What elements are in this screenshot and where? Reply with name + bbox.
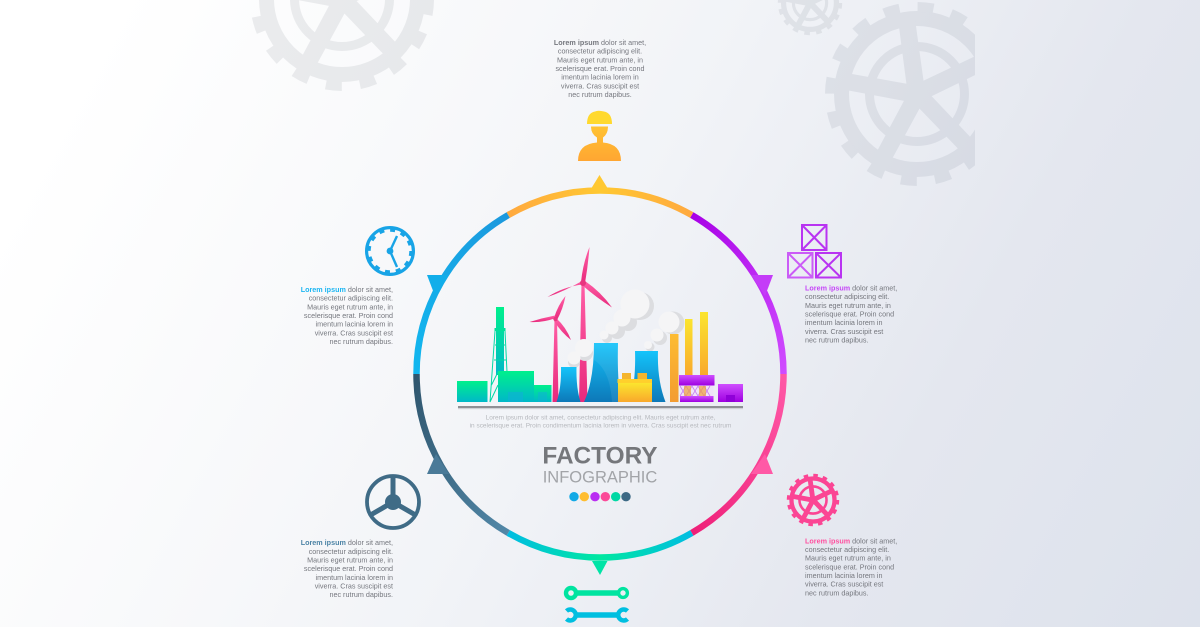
segment: slate	[416, 374, 508, 533]
purple box	[718, 384, 743, 402]
text block: right bottom: Lorem ipsum dolor sit amet,	[805, 536, 897, 545]
text block: left bottom: consectetur adipiscing elit.	[309, 547, 393, 556]
yellow building	[618, 373, 652, 402]
text block: left top: nec rutrum dapibus.	[329, 337, 393, 346]
purple plant	[679, 375, 714, 402]
segment: yellow	[508, 175, 692, 215]
text block: left bottom: imentum lacinia lorem in	[316, 573, 393, 582]
text block: left top: scelerisque erat. Proin cond	[304, 311, 393, 320]
text block: right top: nec rutrum dapibus.	[805, 336, 869, 344]
text block: top: viverra. Cras suscipit est	[561, 81, 639, 90]
background gear: small top right	[780, 0, 840, 33]
text block: left top: Mauris eget rutrum ante, in	[307, 302, 393, 311]
text block: right top	[805, 284, 897, 344]
text block: top: imentum lacinia lorem in	[561, 73, 639, 82]
background gear: top left	[255, 0, 429, 86]
smoke clouds	[568, 290, 684, 368]
text block: right top: Mauris eget rutrum ante, in	[805, 301, 891, 310]
centre caption: Lorem ipsum dolor sit amet, consectetur adipiscing elit. Mauris eget rutrum ante,	[486, 414, 716, 422]
text block: left top: viverra. Cras suscipit est	[315, 328, 393, 337]
icon: stacked crates	[788, 225, 841, 278]
subtitle: infographic: INFOGRAPHIC	[543, 469, 657, 487]
background gear: large right	[830, 7, 1004, 181]
text block: right bottom	[805, 536, 897, 597]
icon: pink gear	[788, 475, 838, 525]
text block: right top: scelerisque erat. Proin cond	[805, 310, 894, 318]
text block: left bottom: scelerisque erat. Proin cond	[304, 564, 393, 573]
title: factory: FACTORY	[542, 442, 658, 469]
text block: left top: Lorem ipsum dolor sit amet,	[301, 285, 393, 294]
icon: steering wheel	[367, 476, 419, 528]
text block: top: Lorem ipsum dolor sit amet,	[554, 38, 646, 47]
text block: top: nec rutrum dapibus.	[568, 90, 632, 99]
segment: teal	[508, 533, 692, 575]
text block: left top	[301, 285, 393, 346]
text block: right top: viverra. Cras suscipit est	[805, 327, 883, 336]
green tank	[457, 381, 488, 402]
centre caption	[470, 414, 731, 430]
text block: top: consectetur adipiscing elit.	[558, 47, 642, 56]
text block: right bottom: Mauris eget rutrum ante, in	[805, 554, 891, 563]
large cooling tower	[584, 343, 621, 402]
colour dots	[569, 492, 631, 501]
icon: ring spanner	[566, 588, 627, 598]
text block: left bottom: viverra. Cras suscipit est	[315, 582, 393, 590]
centre caption: in scelerisque erat. Proin condimentum lacinia lorem in viverra. Cras suscipit est nec rutrum	[470, 422, 731, 430]
yellow chimneys	[670, 312, 708, 402]
right cooling tower	[630, 351, 666, 402]
green chimney with lattice	[490, 307, 507, 402]
factory illustration	[457, 247, 743, 409]
text block: left bottom: nec rutrum dapibus.	[329, 590, 393, 599]
text block: right bottom: imentum lacinia lorem in	[805, 571, 882, 580]
text block: left top: imentum lacinia lorem in	[316, 320, 393, 329]
text block: top: scelerisque erat. Proin cond	[555, 64, 645, 73]
segment: blue	[416, 215, 508, 374]
small cooling tower	[556, 367, 580, 402]
text block: right bottom: viverra. Cras suscipit est	[805, 580, 883, 589]
text block: left bottom	[301, 538, 393, 599]
text block: right top: Lorem ipsum dolor sit amet,	[805, 284, 897, 292]
text block: left bottom: Mauris eget rutrum ante, in	[307, 556, 393, 564]
text block: right top: imentum lacinia lorem in	[805, 318, 882, 327]
large wind turbine	[548, 247, 612, 402]
icon: open spanner	[566, 610, 628, 620]
text block: left top: consectetur adipiscing elit.	[309, 294, 393, 303]
text block: right bottom: scelerisque erat. Proin cond	[805, 562, 894, 571]
ring: six coloured segments with pointers	[416, 175, 784, 575]
green buildings	[498, 371, 552, 402]
small wind turbine	[530, 296, 571, 402]
text block: right bottom: nec rutrum dapibus.	[805, 588, 869, 597]
segment: purple	[692, 215, 784, 374]
segment: pink	[692, 374, 784, 533]
icon: clock	[367, 228, 413, 274]
icon: worker with helmet	[578, 111, 621, 161]
ground line	[458, 406, 743, 409]
text block: right top: consectetur adipiscing elit.	[805, 292, 889, 301]
text block: left bottom: Lorem ipsum dolor sit amet,	[301, 538, 393, 547]
text block: top: Mauris eget rutrum ante, in	[557, 55, 643, 64]
text block: right bottom: consectetur adipiscing elit.	[805, 545, 889, 554]
text block: top	[554, 38, 646, 99]
